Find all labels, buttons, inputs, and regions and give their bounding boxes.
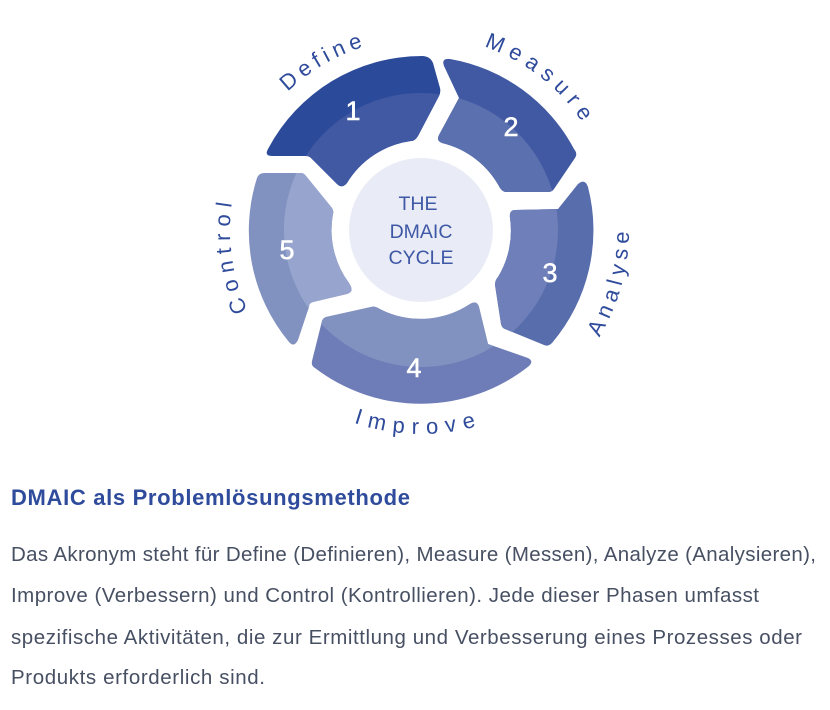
body paragraph: Improve (Verbessern) und Control (Kontrollieren). Jede dieser Phasen umfasst bbox=[11, 584, 759, 607]
body paragraph: Produkts erforderlich sind. bbox=[11, 666, 265, 689]
number 1: 1 bbox=[345, 96, 361, 126]
center circle: CYCLE bbox=[388, 247, 454, 269]
segment 2: Measure bbox=[438, 59, 576, 192]
number 4: 4 bbox=[406, 353, 422, 383]
label: Improve: Improve bbox=[356, 408, 474, 437]
number 5: 5 bbox=[279, 235, 295, 265]
label: Measure: Measure bbox=[486, 32, 590, 120]
label: Control: Control bbox=[216, 202, 246, 314]
number 2: 2 bbox=[503, 112, 519, 142]
segment 5: Control bbox=[249, 173, 352, 345]
number 3: 3 bbox=[542, 258, 558, 288]
body paragraph bbox=[11, 543, 816, 689]
center circle bbox=[349, 158, 493, 302]
label: Analyse: Analyse bbox=[589, 232, 630, 338]
segment 4: Improve bbox=[312, 303, 531, 404]
segment 1: Define bbox=[267, 56, 440, 186]
body paragraph: Das Akronym steht für Define (Definieren), Measure (Messen), Analyze (Analysieren), bbox=[11, 543, 816, 566]
center circle: DMAIC bbox=[390, 221, 452, 243]
segment 3: Analyse bbox=[495, 182, 593, 346]
center circle: THE bbox=[398, 193, 438, 215]
body paragraph: spezifische Aktivitäten, die zur Ermittlung und Verbesserung eines Prozesses oder bbox=[11, 626, 802, 649]
label: Define: Define bbox=[279, 37, 361, 90]
heading: DMAIC als Problemlösungsmethode bbox=[11, 485, 410, 510]
